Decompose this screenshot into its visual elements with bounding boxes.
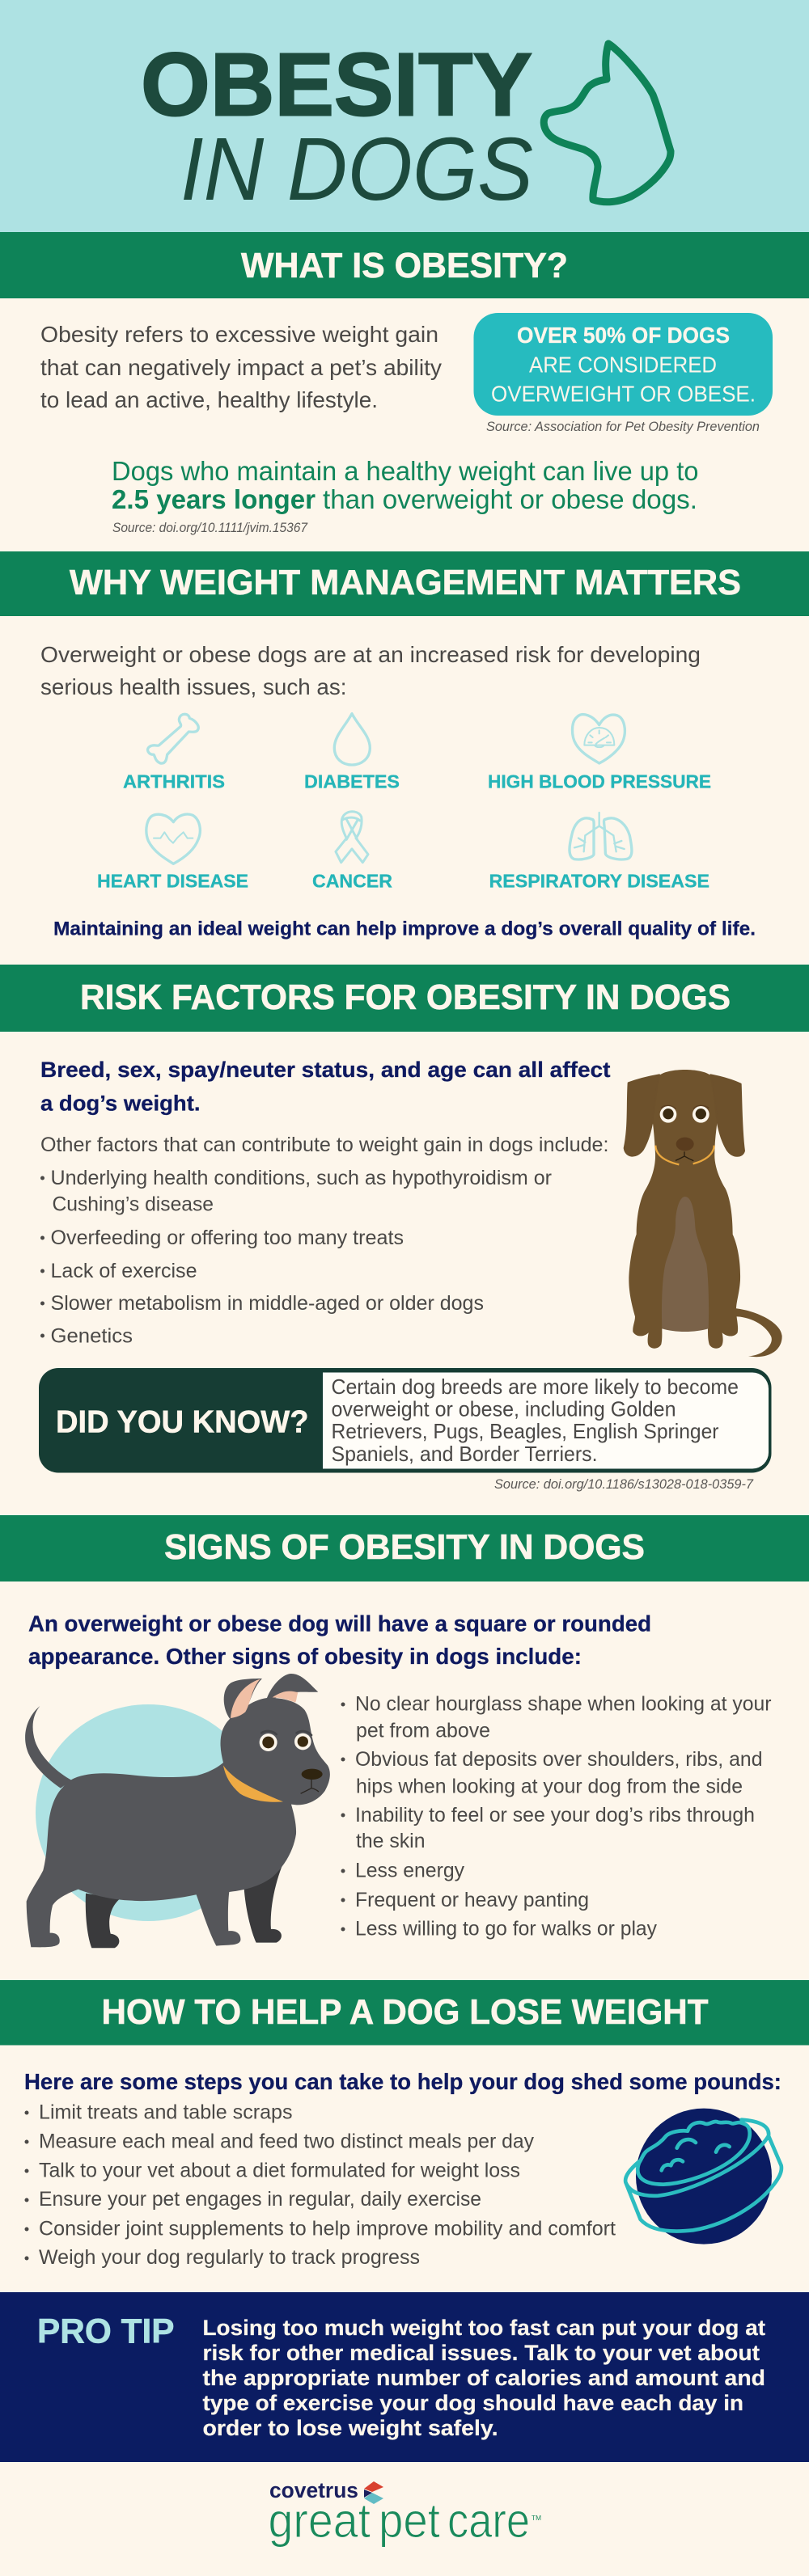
text block: other factors list: Underlying health conditions, such as hypothyroidism or: [50, 1167, 552, 1189]
label: heart disease: HEART DISEASE: [97, 870, 248, 891]
icon: food bowl: [625, 2109, 781, 2244]
text block: signs list: Less willing to go for walks or play: [355, 1918, 657, 1940]
text block: signs list: hips when looking at your dog from the side: [356, 1776, 743, 1798]
callout: did you know: DID YOU KNOW?: [56, 1405, 309, 1439]
illustration: brown sitting dog: [625, 1070, 782, 1357]
text block: pro tip body: risk for other medical issues. Talk to your vet about: [202, 2341, 760, 2365]
icon: heart with gauge: [572, 715, 625, 763]
text block: pro tip body: type of exercise your dog should have each day in: [202, 2391, 743, 2415]
logo: covetrus great pet care: pet: [379, 2494, 440, 2548]
text block: steps list: Talk to your vet about a diet formulated for weight loss: [39, 2159, 520, 2181]
callout: did you know: Spaniels, and Border Terriers.: [332, 1442, 597, 1466]
text block: steps list: Limit treats and table scraps: [39, 2101, 293, 2123]
panel: how to help: [24, 2069, 781, 2269]
logo: covetrus great pet care: [269, 2478, 541, 2548]
text block: definition: that can negatively impact a pet’s ability: [40, 355, 442, 380]
callout: over 50 percent: ARE CONSIDERED: [529, 353, 717, 377]
title: IN DOGS: [180, 120, 533, 219]
text block: other factors list: [40, 1134, 608, 1347]
text block: steps list: Weigh your dog regularly to track progress: [39, 2246, 420, 2269]
source note: Source: doi.org/10.1111/jvim.15367: [112, 520, 307, 535]
text block: definition: Obesity refers to excessive weight gain: [40, 322, 438, 347]
text block: pro tip body: the appropriate number of calories and amount and: [202, 2366, 765, 2390]
heading: appearance: [28, 1611, 651, 1669]
label: respiratory disease: RESPIRATORY DISEASE: [489, 870, 709, 891]
callout: over 50 percent: OVERWEIGHT OR OBESE.: [491, 382, 756, 406]
heading: breed, sex, status: [40, 1058, 610, 1116]
header panel: [0, 0, 809, 233]
text block: signs list: Less energy: [355, 1860, 464, 1882]
text block: other factors list: Lack of exercise: [50, 1260, 197, 1282]
text block: healthy weight statement: than overweight or obese dogs.: [323, 484, 697, 514]
icon: lungs: [570, 813, 632, 859]
text block: definition: to lead an active, healthy lifestyle.: [40, 387, 378, 412]
heading: appearance: An overweight or obese dog will have a square or rounded: [28, 1611, 651, 1636]
callout: did you know: Certain dog breeds are more likely to become: [332, 1375, 739, 1399]
section header: how to help: HOW TO HELP A DOG LOSE WEIGHT: [102, 1993, 709, 2032]
section header: why weight management matters: [0, 551, 809, 616]
text block: signs list: Frequent or heavy panting: [355, 1889, 589, 1911]
section header: signs of obesity: [0, 1515, 809, 1581]
section header: what is obesity: [0, 232, 809, 298]
panel: pro tip: [0, 2292, 809, 2462]
callout: did you know: overweight or obese, including Golden: [332, 1397, 676, 1421]
callout: over 50 percent: [474, 313, 773, 416]
label: cancer: CANCER: [312, 870, 392, 891]
panel: risk factors: [39, 1058, 782, 1492]
text block: intro: serious health issues, such as:: [40, 674, 346, 699]
text block: healthy weight statement: Dogs who maintain a healthy weight can live up to: [112, 456, 699, 486]
text block: other factors list: Cushing’s disease: [52, 1193, 214, 1216]
panel: what is obesity: [40, 313, 773, 535]
logo: covetrus great pet care: TM: [532, 2515, 541, 2522]
icon: bone: [148, 714, 198, 763]
title: OBESITY: [141, 36, 532, 134]
text block: healthy weight statement: [112, 456, 699, 514]
text block: pro tip body: Losing too much weight too fast can put your dog at: [202, 2316, 765, 2340]
panel: health risks: [40, 642, 756, 940]
source note: Source: Association for Pet Obesity Prevention: [486, 419, 760, 434]
text block: pro tip body: order to lose weight safely.: [202, 2416, 498, 2440]
title: [141, 36, 533, 219]
text block: steps list: [24, 2101, 616, 2269]
text block: steps list: Measure each meal and feed two distinct meals per day: [39, 2130, 534, 2152]
text block: signs list: [341, 1693, 772, 1940]
section header: risk factors: RISK FACTORS FOR OBESITY IN DOGS: [80, 978, 731, 1017]
text block: intro: [40, 642, 701, 699]
label: high blood pressure: HIGH BLOOD PRESSURE: [488, 771, 711, 792]
callout: over 50 percent: OVER 50% OF DOGS: [517, 323, 730, 348]
text block: definition: [40, 322, 442, 412]
text block: other factors list: Slower metabolism in middle-aged or older dogs: [50, 1292, 484, 1315]
illustration: overweight grey dog: [25, 1674, 330, 1948]
callout: did you know: [39, 1368, 772, 1473]
logo: covetrus great pet care: great: [269, 2494, 371, 2548]
text block: quality of life: Maintaining an ideal weight can help improve a dog’s overall quality of life.: [53, 918, 756, 940]
icon: heart with pulse: [146, 814, 200, 864]
text block: signs list: No clear hourglass shape when looking at your: [355, 1693, 772, 1716]
icon: ribbon: [336, 812, 368, 863]
text block: intro: Overweight or obese dogs are at an increased risk for developing: [40, 642, 701, 667]
label: arthritis: ARTHRITIS: [123, 771, 225, 792]
heading: breed, sex, status: Breed, sex, spay/neuter status, and age can all affect: [40, 1058, 610, 1082]
heading: breed, sex, status: a dog’s weight.: [40, 1092, 201, 1116]
text block: steps list: Ensure your pet engages in regular, daily exercise: [39, 2188, 481, 2211]
text block: other factors list: Overfeeding or offering too many treats: [50, 1227, 404, 1249]
section header: how to help: [0, 1980, 809, 2046]
heading: pro tip: PRO TIP: [37, 2312, 175, 2351]
section header: signs of obesity: SIGNS OF OBESITY IN DOGS: [164, 1528, 645, 1567]
text block: steps list: Consider joint supplements to help improve mobility and comfort: [39, 2217, 616, 2240]
text block: other factors list: Other factors that can contribute to weight gain in dogs include:: [40, 1134, 608, 1156]
text block: signs list: the skin: [356, 1830, 426, 1852]
text block: signs list: Inability to feel or see your dog’s ribs through: [355, 1804, 755, 1826]
text block: signs list: Obvious fat deposits over shoulders, ribs, and: [355, 1748, 762, 1771]
panel: signs of obesity: [25, 1611, 771, 1948]
text block: healthy weight statement: 2.5 years longer: [112, 484, 316, 514]
label: diabetes: DIABETES: [304, 771, 400, 792]
icon: dog head outline: [544, 44, 671, 202]
text block: other factors list: Genetics: [50, 1324, 133, 1347]
text block: signs list: pet from above: [356, 1719, 490, 1742]
text block: pro tip body: [202, 2316, 765, 2440]
section header: what is obesity: WHAT IS OBESITY?: [241, 247, 568, 285]
icon: water drop: [334, 714, 370, 765]
logo: covetrus great pet care: care: [447, 2494, 530, 2548]
heading: steps: Here are some steps you can take to help your dog shed some pounds:: [24, 2069, 781, 2094]
logo: covetrus great pet care: covetrus: [269, 2478, 358, 2502]
section header: why weight management matters: WHY WEIGHT MANAGEMENT MATTERS: [70, 564, 741, 602]
callout: did you know: Retrievers, Pugs, Beagles, English Springer: [332, 1419, 719, 1443]
heading: appearance: appearance. Other signs of obesity in dogs include:: [28, 1644, 582, 1669]
source note: Source: doi.org/10.1186/s13028-018-0359-7: [494, 1476, 754, 1492]
section header: risk factors: [0, 965, 809, 1032]
